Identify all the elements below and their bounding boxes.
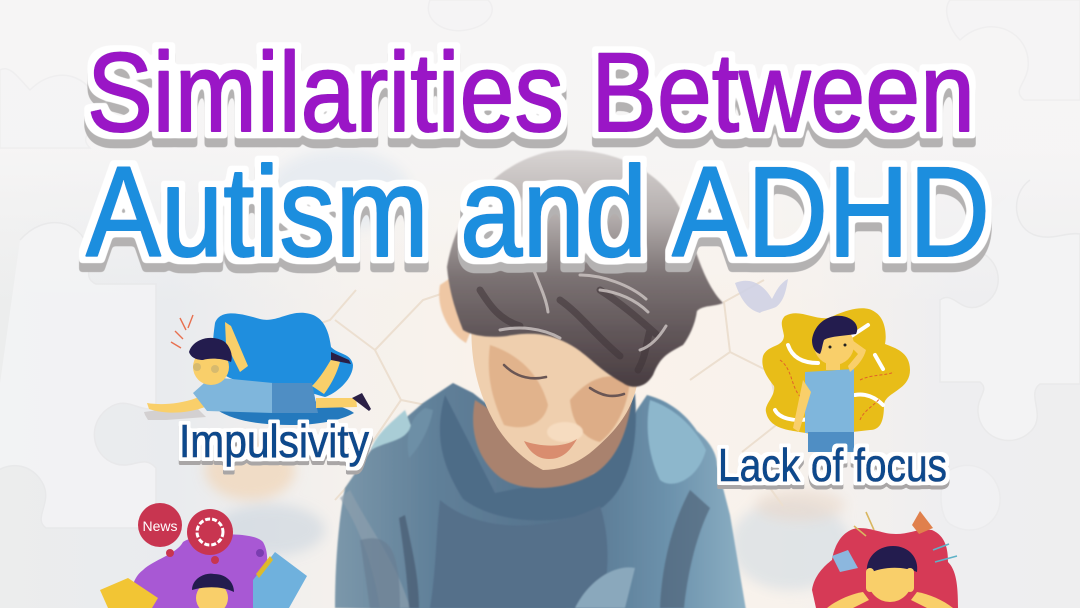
label: Impulsivity: Impulsivity — [179, 415, 369, 467]
shirt brush shading — [340, 393, 710, 608]
boy neck — [473, 390, 633, 488]
cracked ground lines — [300, 280, 818, 506]
label: Lack of focus: Lack of focus — [718, 439, 947, 491]
icon: child with lack of focus — [762, 308, 910, 452]
icon: overloaded child: News — [142, 518, 178, 534]
icon: impulsive boy falling — [144, 313, 371, 425]
face shading — [489, 345, 630, 442]
icon: child covering ears — [812, 511, 958, 608]
boy eyes — [504, 365, 624, 396]
boy hair — [447, 150, 723, 387]
icon: overloaded child — [100, 503, 307, 608]
boy shirt — [335, 383, 747, 608]
hair strands — [480, 260, 666, 370]
boy mouth — [524, 439, 577, 459]
butterfly — [735, 279, 788, 313]
title line 1: Similarities Between — [87, 30, 975, 155]
boy ear — [439, 273, 478, 343]
illustration: boy looking down — [335, 150, 747, 608]
pale painted wash around the boy — [205, 150, 850, 590]
boy face — [471, 295, 637, 470]
